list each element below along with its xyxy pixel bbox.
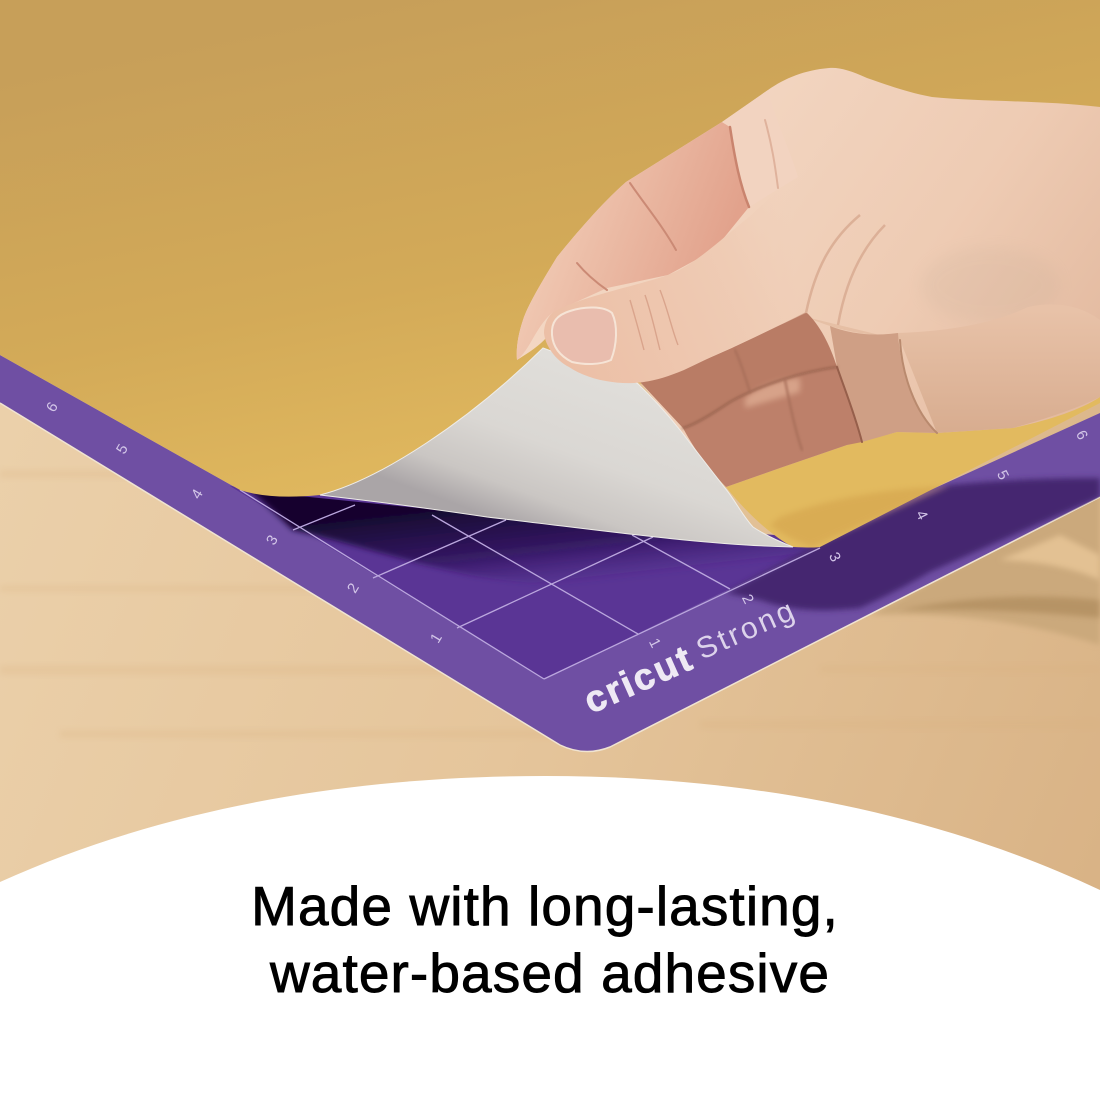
caption: Made with long-lasting,	[251, 875, 839, 937]
gold sheet	[0, 0, 1100, 548]
mat ruler numbers	[43, 399, 1091, 651]
mat brand: cricut: cricut	[578, 638, 697, 721]
hand silhouette	[517, 68, 1100, 487]
inner palm fold	[830, 326, 937, 442]
caption: water-based adhesive	[270, 942, 830, 1004]
mat ruler numbers: 4	[912, 508, 931, 523]
mat ruler numbers: 5	[113, 441, 132, 457]
hand	[517, 68, 1100, 487]
mat grid area	[230, 486, 830, 679]
shadows under peeled sheet	[240, 478, 1100, 610]
thumb	[544, 177, 885, 383]
mat ruler numbers: 6	[1072, 428, 1091, 443]
purple cutting mat	[0, 355, 1100, 752]
mat ruler numbers: 1	[645, 636, 664, 651]
mat ruler numbers: 3	[263, 532, 282, 548]
thumb wrinkles	[630, 290, 678, 350]
knuckle folds	[722, 90, 798, 207]
middle finger	[640, 312, 837, 428]
mat ruler numbers: 5	[993, 468, 1012, 483]
thumb nail	[552, 307, 616, 364]
white curved panel	[0, 776, 1100, 1100]
hand vein shadow	[920, 247, 1060, 323]
mat label: Strong: Strong	[691, 594, 799, 666]
grid lines	[240, 490, 820, 679]
thumb base folds	[806, 215, 885, 325]
peeled sheet underside	[320, 348, 793, 547]
mat ruler numbers: 2	[344, 580, 363, 596]
mat ruler numbers: 2	[738, 592, 757, 607]
mat ruler numbers: 6	[43, 399, 62, 415]
ring finger	[683, 367, 862, 487]
mat ruler numbers: 1	[427, 630, 446, 646]
caption	[251, 875, 839, 1004]
shadow on table	[870, 490, 1100, 645]
index finger	[517, 122, 749, 360]
finger highlight	[745, 378, 800, 408]
mat ruler numbers: 3	[825, 550, 844, 565]
finger creases	[577, 120, 937, 450]
mat ruler numbers: 4	[188, 486, 207, 502]
palm	[806, 304, 1100, 433]
